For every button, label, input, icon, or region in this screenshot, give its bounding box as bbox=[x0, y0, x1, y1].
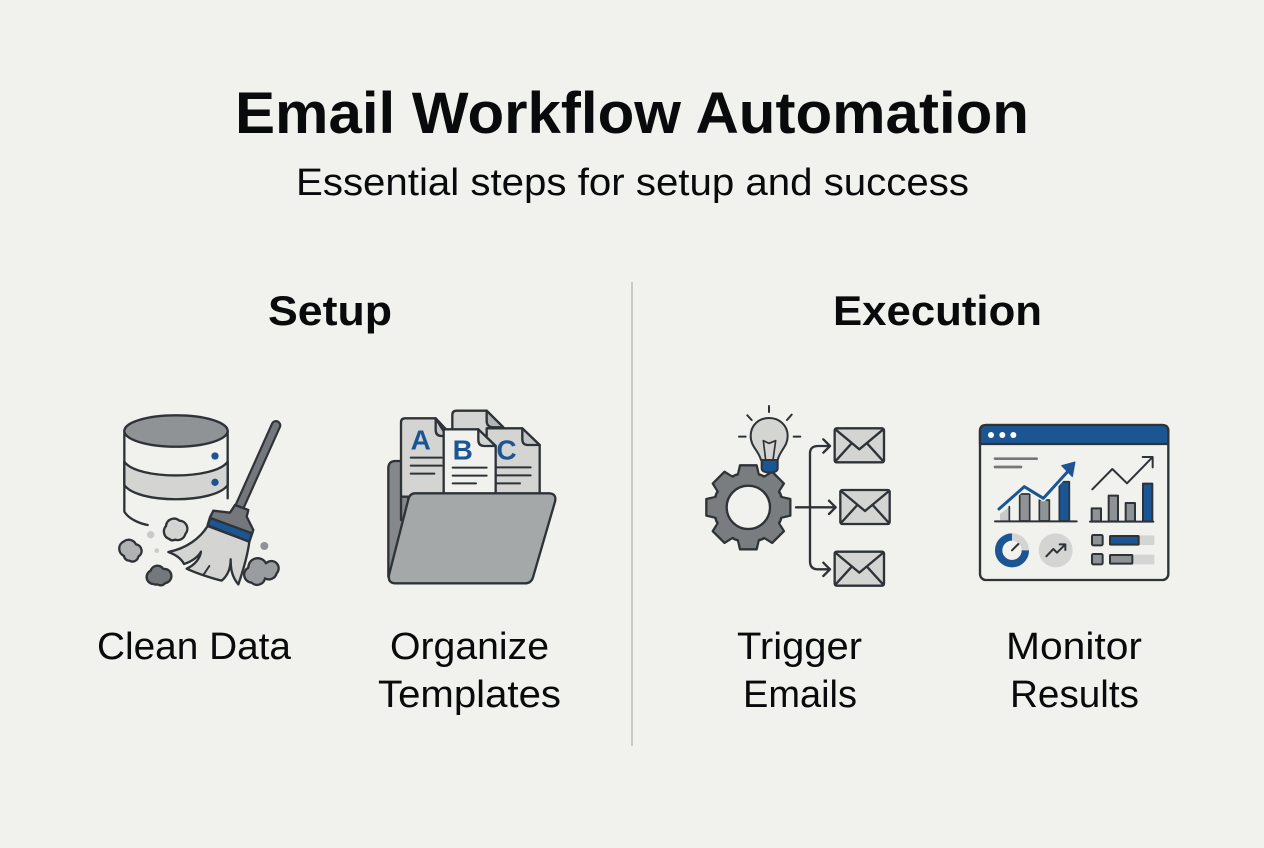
label: Clean Data: Clean Data bbox=[97, 626, 292, 668]
icon: database and broom bbox=[119, 415, 279, 585]
icon: gear, bulb and emails bbox=[706, 406, 890, 586]
dust cloud 3 bbox=[147, 566, 171, 585]
label: Organize Templates: Organize bbox=[390, 626, 549, 668]
email 2 bbox=[840, 490, 890, 524]
label: Monitor Results: Monitor bbox=[1006, 626, 1142, 668]
document C: C bbox=[496, 434, 517, 465]
left chart bbox=[995, 462, 1077, 521]
email 1 bbox=[835, 428, 884, 462]
subtitle: Essential steps for setup and success bbox=[296, 162, 969, 204]
dust cloud 4 bbox=[244, 558, 279, 585]
document A: A bbox=[411, 424, 431, 455]
heading: Setup: Setup bbox=[268, 287, 392, 334]
label: Trigger Emails: Emails bbox=[743, 674, 857, 716]
icon: folder with templates bbox=[388, 411, 555, 583]
heading: Execution: Execution bbox=[833, 287, 1042, 334]
right chart bbox=[1090, 457, 1153, 522]
icon: results dashboard bbox=[980, 425, 1168, 580]
title: Email Workflow Automation bbox=[235, 81, 1029, 146]
donut gauge bbox=[999, 537, 1025, 564]
document B: B bbox=[453, 434, 473, 465]
label: Organize Templates: Templates bbox=[378, 674, 561, 716]
mini trend badge bbox=[1039, 533, 1073, 567]
dust cloud 1 bbox=[164, 519, 187, 540]
label: Trigger Emails: Trigger bbox=[737, 626, 862, 668]
email 3 bbox=[835, 552, 884, 586]
label: Monitor Results: Results bbox=[1010, 674, 1139, 716]
list rows bbox=[1092, 535, 1154, 564]
dust cloud 2 bbox=[119, 540, 142, 562]
